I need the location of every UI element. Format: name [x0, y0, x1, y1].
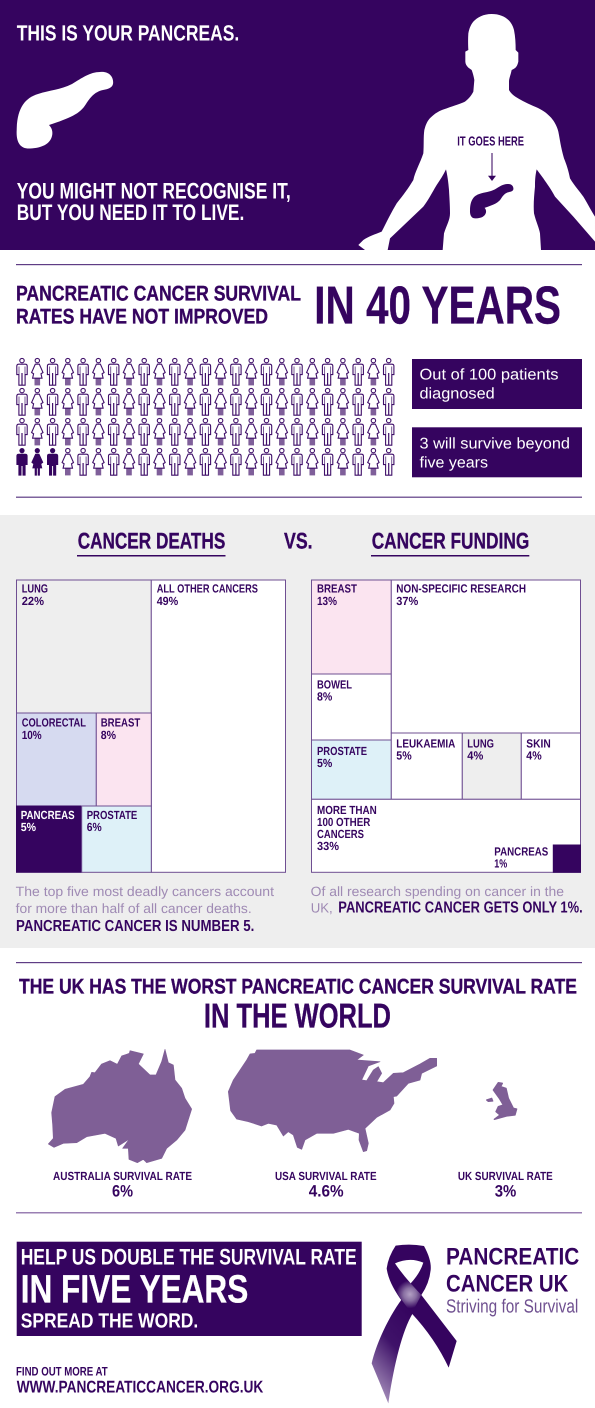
- cell: skin: 4%: [526, 749, 542, 763]
- chart: 100 patient pictogram: [16, 358, 394, 476]
- cell: pancreas: [494, 845, 580, 872]
- cell: non-specific research: [391, 580, 580, 733]
- cell: more than 100 other cancers: MORE THAN: [317, 803, 377, 817]
- logo: pancreatic cancer uk: [446, 1243, 579, 1318]
- label: usa rate: [275, 1169, 377, 1201]
- cell: lung: LUNG: [467, 737, 494, 751]
- label: uk rate: UK SURVIVAL RATE: [458, 1169, 553, 1183]
- cell: breast: BREAST: [317, 582, 358, 596]
- cell: lung: 4%: [467, 749, 484, 763]
- heading: in the world: IN THE WORLD: [204, 998, 391, 1036]
- cell: more than 100 other cancers: 100 OTHER: [317, 815, 371, 829]
- callout: 3 will survive: 3 will survive beyond: [420, 435, 570, 452]
- cell: more than 100 other cancers: 33%: [317, 839, 339, 853]
- map: australia: [48, 1049, 192, 1163]
- cell: all other cancers: [151, 580, 286, 872]
- cell: leukaemia: LEUKAEMIA: [396, 737, 456, 751]
- cell: more than 100 other cancers: [312, 799, 580, 872]
- cell: leukaemia: [391, 733, 462, 799]
- logo: pancreatic cancer uk: CANCER UK: [446, 1271, 569, 1298]
- panel: header: [0, 0, 595, 250]
- label: uk rate: 3%: [495, 1183, 517, 1201]
- heading: survival rates have not improved: PANCREATIC CANCER SURVIVAL: [16, 283, 301, 306]
- icon: pancreas in body: [470, 184, 513, 218]
- map: uk: [487, 1083, 517, 1119]
- text block: find out more: FIND OUT MORE AT: [16, 1365, 108, 1379]
- label: usa rate: USA SURVIVAL RATE: [275, 1169, 377, 1183]
- callout: 3 will survive: five years: [420, 454, 488, 471]
- text block: deaths caption: [16, 884, 274, 935]
- cell: pancreas: 1%: [494, 857, 508, 871]
- cell: prostate: PROSTATE: [317, 744, 367, 758]
- cell: prostate: 5%: [317, 756, 333, 770]
- cell: prostate: [312, 740, 391, 799]
- cell: lung: [462, 733, 521, 799]
- text block: deaths caption: The top five most deadly cancers account: [16, 884, 274, 899]
- cell: breast: BREAST: [101, 716, 141, 730]
- text block: you need it to live: [17, 178, 291, 225]
- cell: leukaemia: 5%: [396, 749, 412, 763]
- cell: breast: [96, 713, 151, 806]
- cell: breast: 8%: [101, 728, 116, 742]
- cell: prostate: PROSTATE: [87, 808, 137, 822]
- text block: find out more: WWW.PANCREATICCANCER.ORG.UK: [17, 1378, 264, 1397]
- cell: breast: [312, 580, 391, 674]
- text block: find out more: [16, 1365, 264, 1397]
- heading: cancer funding: CANCER FUNDING: [372, 528, 529, 553]
- icons: three survivors highlighted: [16, 448, 394, 476]
- text block: you need it to live: YOU MIGHT NOT RECOGNISE IT,: [17, 178, 291, 203]
- cell: lung: [16, 580, 151, 713]
- text block: funding caption: [311, 884, 583, 917]
- heading: cancer deaths: CANCER DEATHS: [78, 528, 225, 553]
- cell: all other cancers: ALL OTHER CANCERS: [157, 582, 258, 596]
- heading: vs: VS.: [284, 528, 313, 553]
- panel: call to action: SPREAD THE WORD.: [21, 1309, 198, 1332]
- cell: non-specific research: NON-SPECIFIC RESEARCH: [396, 582, 526, 596]
- cell: pancreas: PANCREAS: [21, 808, 75, 822]
- icon: awareness ribbon: [372, 1245, 457, 1403]
- label: australia rate: 6%: [112, 1183, 133, 1201]
- label: australia rate: AUSTRALIA SURVIVAL RATE: [53, 1169, 192, 1183]
- cell: pancreas: PANCREAS: [494, 845, 548, 859]
- map: usa: [228, 1050, 437, 1152]
- cell: bowel: [312, 674, 391, 740]
- icon: body silhouette: [358, 14, 595, 250]
- cell: non-specific research: 37%: [396, 594, 419, 608]
- chart: cancer deaths treemap: [16, 580, 286, 872]
- cell: pancreas: 5%: [21, 820, 36, 834]
- cell: all other cancers: 49%: [157, 594, 179, 608]
- heading: survival rates have not improved: [16, 283, 301, 328]
- cell: skin: SKIN: [526, 737, 551, 751]
- chart: cancer funding treemap: [312, 580, 580, 872]
- cell: breast: 13%: [317, 594, 337, 608]
- cell: colorectal: 10%: [22, 728, 42, 742]
- cell: lung: LUNG: [22, 582, 48, 596]
- cell: prostate: [82, 806, 151, 872]
- text block: you need it to live: BUT YOU NEED IT TO LIVE.: [17, 200, 244, 225]
- text block: deaths caption: PANCREATIC CANCER IS NUMBER 5.: [16, 918, 254, 935]
- cell: prostate: 6%: [87, 820, 102, 834]
- label: australia rate: [53, 1169, 192, 1201]
- heading: survival rates have not improved: RATES HAVE NOT IMPROVED: [16, 305, 268, 328]
- label: it goes here: IT GOES HERE: [457, 133, 524, 148]
- cell: skin: [521, 733, 580, 799]
- label: uk rate: [458, 1169, 553, 1201]
- cell: lung: 22%: [22, 594, 44, 608]
- cell: colorectal: COLORECTAL: [22, 716, 86, 730]
- panel: call to action: [17, 1242, 362, 1336]
- icon: white pancreas: [17, 72, 113, 149]
- text block: deaths caption: for more than half of all cancer deaths.: [16, 901, 252, 916]
- panel: call to action: IN FIVE YEARS: [21, 1268, 248, 1312]
- callout: out of 100 patients: [412, 359, 582, 409]
- callout: 3 will survive: [412, 427, 582, 477]
- cell: colorectal: [16, 713, 96, 806]
- panel: call to action: HELP US DOUBLE THE SURVIVAL RATE: [21, 1244, 357, 1269]
- text block: funding caption: UK,: [311, 901, 333, 916]
- label: usa rate: 4.6%: [309, 1183, 344, 1201]
- cell: bowel: BOWEL: [317, 678, 352, 692]
- panel: deaths vs funding: [0, 515, 595, 948]
- arrow: down to pancreas: [488, 153, 496, 181]
- heading: this is your pancreas: THIS IS YOUR PANCREAS.: [17, 21, 239, 46]
- cell: pancreas: [16, 806, 82, 872]
- text block: funding caption: Of all research spending on cancer in the: [311, 884, 564, 899]
- cell: more than 100 other cancers: CANCERS: [317, 827, 364, 841]
- callout: out of 100 patients: Out of 100 patients: [420, 366, 559, 383]
- cell: bowel: 8%: [317, 690, 333, 704]
- callout: out of 100 patients: diagnosed: [420, 385, 495, 402]
